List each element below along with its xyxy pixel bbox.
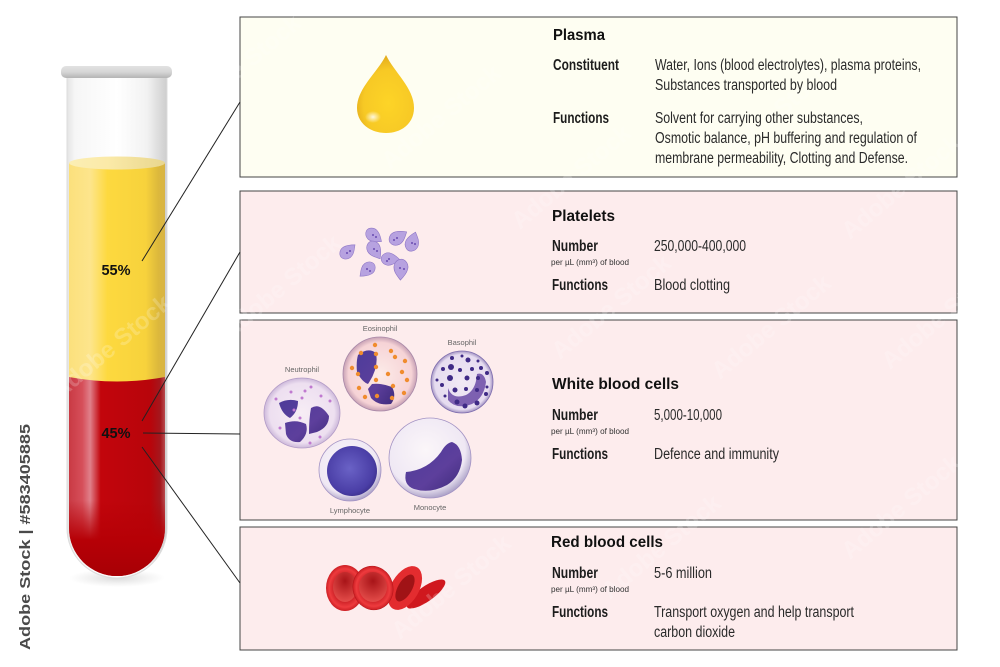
cell third — [381, 560, 429, 616]
text: plasma: Functions — [553, 110, 609, 127]
text: plasma: Substances transported by blood — [655, 77, 837, 94]
panel: red blood cells — [240, 527, 957, 650]
text: red blood cells: Number — [552, 565, 598, 582]
watermark pattern: Adobe Stock — [177, 9, 307, 125]
watermark pattern: Adobe Stock — [707, 59, 837, 175]
tube rim — [61, 66, 172, 78]
text: plasma: Osmotic balance, pH buffering and regulation of — [655, 130, 918, 147]
connector lines — [142, 102, 240, 583]
text: plasma: Solvent for carrying other substances, — [655, 110, 863, 127]
icon: red blood cells — [326, 560, 449, 616]
stock credit: Adobe Stock | #583405885 — [17, 424, 34, 650]
label 55%: 55% — [101, 263, 131, 279]
text: white blood cells — [551, 376, 779, 463]
white blood cell names: Lymphocyte — [330, 506, 370, 515]
cell first — [326, 565, 364, 611]
text: white blood cells: 5,000-10,000 — [654, 407, 722, 424]
text: red blood cells: carbon dioxide — [654, 624, 735, 641]
text: platelets: Number — [552, 238, 598, 255]
icon: neutrophil — [264, 378, 340, 448]
text: red blood cells: 5-6 million — [654, 565, 712, 582]
text: white blood cells: Number — [552, 407, 598, 424]
text: platelets: Platelets — [552, 208, 615, 225]
text: platelets: per µL (mm³) of blood — [551, 258, 629, 267]
watermark pattern: Adobe Stock — [837, 129, 967, 245]
test tube — [61, 66, 172, 587]
icon: basophil — [431, 351, 493, 413]
cell second — [348, 562, 398, 614]
white blood cell names: Monocyte — [414, 503, 446, 512]
watermark pattern: Adobe Stock — [707, 269, 837, 385]
text: red blood cells — [551, 534, 855, 641]
text: white blood cells: White blood cells — [552, 376, 679, 393]
watermark pattern: Adobe Stock — [217, 229, 347, 345]
white blood cell names: Basophil — [448, 338, 477, 347]
text: white blood cells: Functions — [552, 446, 608, 463]
white blood cell names: Eosinophil — [363, 324, 398, 333]
text: red blood cells: Functions — [552, 604, 608, 621]
icon: monocyte — [389, 418, 471, 498]
watermark pattern: Adobe Stock — [47, 289, 177, 405]
text: plasma: membrane permeability, Clotting and Defense. — [655, 150, 908, 167]
cell layer liquid — [69, 377, 165, 576]
text: platelets: 250,000-400,000 — [654, 238, 746, 255]
text: red blood cells: Red blood cells — [551, 534, 663, 551]
cell far right — [403, 575, 449, 613]
text: red blood cells: Transport oxygen and help transport — [654, 604, 855, 621]
watermark pattern: Adobe Stock — [387, 529, 517, 645]
watermark pattern: Adobe Stock — [837, 449, 967, 565]
panel: platelets — [240, 191, 957, 313]
watermark pattern: Adobe Stock — [597, 489, 727, 605]
text: red blood cells: per µL (mm³) of blood — [551, 585, 629, 594]
text: platelets: Blood clotting — [654, 277, 730, 294]
icon: lymphocyte — [319, 439, 381, 501]
icon: eosinophil — [343, 337, 417, 411]
watermark pattern: Adobe Stock — [547, 249, 677, 365]
text: plasma: Plasma — [553, 27, 605, 44]
text: plasma: Constituent — [553, 57, 619, 74]
panel: white blood cells — [240, 320, 957, 520]
icon: platelets — [340, 227, 423, 280]
watermark pattern: Adobe Stock — [507, 119, 637, 235]
text: white blood cells: Defence and immunity — [654, 446, 779, 463]
icon: plasma drop — [357, 55, 414, 133]
tube shadow — [69, 569, 165, 587]
tube glass — [67, 74, 167, 578]
text: platelets: Functions — [552, 277, 608, 294]
panel: plasma — [240, 17, 957, 177]
white blood cell names — [285, 324, 477, 515]
text: plasma: Water, Ions (blood electrolytes), plasma proteins, — [655, 57, 921, 74]
white blood cell names: Neutrophil — [285, 365, 319, 374]
plasma liquid — [69, 156, 165, 382]
text: platelets — [551, 208, 746, 294]
text: plasma — [553, 27, 921, 167]
label 45%: 45% — [101, 426, 131, 442]
watermark pattern: Adobe Stock — [377, 59, 507, 175]
text: white blood cells: per µL (mm³) of blood — [551, 427, 629, 436]
